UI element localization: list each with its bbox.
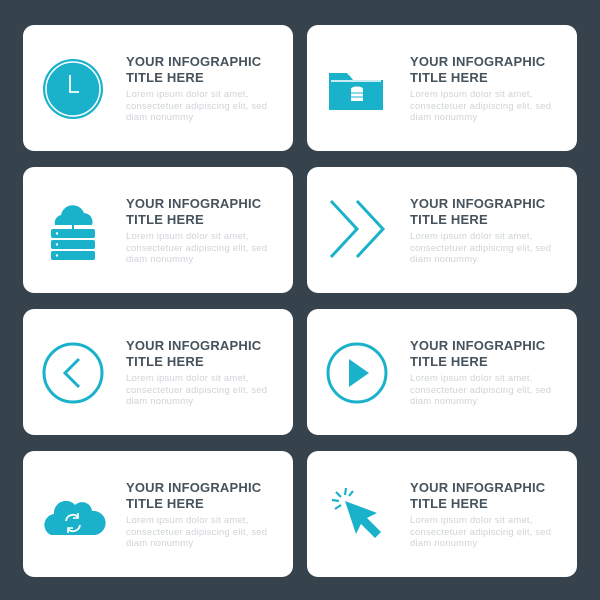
text: body xyxy=(410,231,551,265)
text: title: YOUR INFOGRAPHIC xyxy=(410,54,545,69)
text: body: consectetuer adipiscing elit, sed xyxy=(126,384,267,396)
text: body: Lorem ipsum dolor sit amet, xyxy=(126,515,249,526)
icon: clock xyxy=(43,59,103,119)
text: title: TITLE HERE xyxy=(126,70,204,85)
card: cloud sync xyxy=(23,451,293,577)
text: body xyxy=(126,89,267,123)
text: title xyxy=(410,196,545,227)
text: title xyxy=(126,338,261,369)
text: body: consectetuer adipiscing elit, sed xyxy=(126,526,267,538)
text: body: Lorem ipsum dolor sit amet, xyxy=(410,515,533,526)
text: body: Lorem ipsum dolor sit amet, xyxy=(410,89,533,100)
text: title xyxy=(126,54,261,85)
text: body: diam nonummy xyxy=(410,538,477,549)
text: title: YOUR INFOGRAPHIC xyxy=(410,196,545,211)
text: body xyxy=(126,373,267,407)
text: body: consectetuer adipiscing elit, sed xyxy=(410,242,551,254)
text: title: TITLE HERE xyxy=(410,496,488,511)
icon: cloud sync xyxy=(44,500,106,535)
text: title xyxy=(410,338,545,369)
text: title: TITLE HERE xyxy=(126,354,204,369)
text: title: YOUR INFOGRAPHIC xyxy=(126,480,261,495)
text: body xyxy=(410,373,551,407)
text: title: TITLE HERE xyxy=(410,212,488,227)
text: title: TITLE HERE xyxy=(410,70,488,85)
text: body: Lorem ipsum dolor sit amet, xyxy=(126,89,249,100)
text: body: diam nonummy xyxy=(126,112,193,123)
text: body: diam nonummy xyxy=(126,396,193,407)
card: cursor xyxy=(307,451,577,577)
text: body: Lorem ipsum dolor sit amet, xyxy=(126,373,249,384)
text: body: consectetuer adipiscing elit, sed xyxy=(410,384,551,396)
text: title: YOUR INFOGRAPHIC xyxy=(126,54,261,69)
text: body: consectetuer adipiscing elit, sed xyxy=(126,100,267,112)
text: body: diam nonummy xyxy=(410,254,477,265)
text: body: diam nonummy xyxy=(126,254,193,265)
text: body: diam nonummy xyxy=(410,396,477,407)
text: title: YOUR INFOGRAPHIC xyxy=(126,338,261,353)
text: body xyxy=(410,89,551,123)
icon: play circle xyxy=(326,342,388,404)
text: title: TITLE HERE xyxy=(126,496,204,511)
card: folder xyxy=(307,25,577,151)
text: body: consectetuer adipiscing elit, sed xyxy=(410,526,551,538)
text: title: YOUR INFOGRAPHIC xyxy=(410,338,545,353)
text: body: Lorem ipsum dolor sit amet, xyxy=(410,373,533,384)
icon: click cursor xyxy=(332,488,381,538)
text: body: consectetuer adipiscing elit, sed xyxy=(126,242,267,254)
text: title: TITLE HERE xyxy=(410,354,488,369)
text: body xyxy=(410,515,551,549)
icon: cloud server xyxy=(51,205,95,260)
text: title: TITLE HERE xyxy=(126,212,204,227)
icon: back circle xyxy=(42,342,104,404)
text: title xyxy=(410,54,545,85)
text: body xyxy=(126,515,267,549)
text: body: Lorem ipsum dolor sit amet, xyxy=(410,231,533,242)
card: clock xyxy=(23,25,293,151)
card: play xyxy=(307,309,577,435)
text: title: YOUR INFOGRAPHIC xyxy=(410,480,545,495)
text: title xyxy=(126,196,261,227)
text: title xyxy=(410,480,545,511)
card: back xyxy=(23,309,293,435)
text: body: diam nonummy xyxy=(126,538,193,549)
icon: database folder xyxy=(329,73,383,110)
text: body xyxy=(126,231,267,265)
text: body: Lorem ipsum dolor sit amet, xyxy=(126,231,249,242)
card: double chevron xyxy=(307,167,577,293)
text: body: diam nonummy xyxy=(410,112,477,123)
card: cloud server xyxy=(23,167,293,293)
text: title: YOUR INFOGRAPHIC xyxy=(126,196,261,211)
text: title xyxy=(126,480,261,511)
text: body: consectetuer adipiscing elit, sed xyxy=(410,100,551,112)
icon: double chevron xyxy=(330,200,385,258)
